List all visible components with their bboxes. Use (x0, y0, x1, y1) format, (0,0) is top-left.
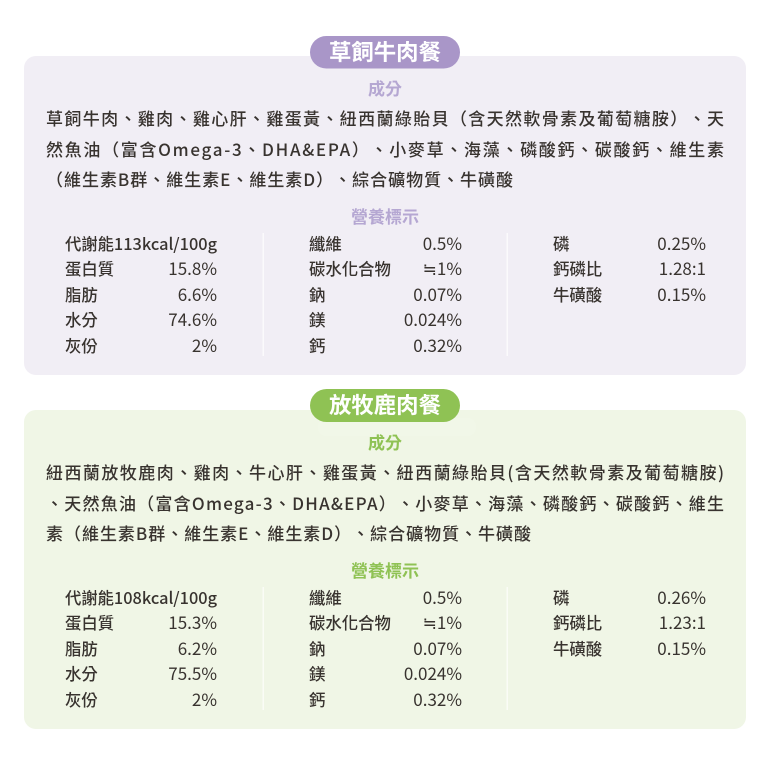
nutrition column 2 (309, 584, 462, 711)
nutrition column 2: 0.5% (423, 230, 462, 255)
ingredients text: 素（維生素B群、維生素E、維生素D）、綜合礦物質、牛磺酸 (46, 520, 531, 545)
panel: free-range venison meal (24, 388, 746, 729)
heading: ingredients: 成分 (368, 75, 402, 100)
nutrition column 1: 15.3% (168, 609, 217, 634)
ingredients text: 、天然魚油（富含Omega-3、DHA&EPA）、小麥草、海藻、磷酸鈣、碳酸鈣、維生 (46, 490, 724, 515)
nutrition column 1: 灰份 (65, 333, 98, 357)
nutrition column 2: 鈣 (309, 333, 325, 357)
nutrition column 2: 0.024% (404, 306, 462, 331)
nutrition column 3: 0.15% (657, 281, 706, 306)
heading: nutrition facts: 營養標示 (351, 557, 419, 582)
nutrition column 1: 2% (192, 332, 217, 357)
nutrition column 1: 6.6% (178, 281, 217, 306)
nutrition column 3: 磷 (553, 231, 569, 255)
ingredients text (46, 459, 724, 545)
nutrition column 2: 碳水化合物 (309, 610, 391, 634)
nutrition column 2: 0.5% (423, 584, 462, 609)
nutrition column 2: 碳水化合物 (309, 256, 391, 280)
nutrition column 1 (65, 231, 218, 357)
nutrition column 2 (309, 230, 462, 357)
nutrition column 1: 代謝能108kcal/100g (65, 585, 218, 609)
nutrition column 1: 2% (192, 686, 217, 711)
nutrition column 2: 纖維 (309, 585, 342, 609)
title pill: beef: 草飼牛肉餐 (329, 35, 441, 67)
nutrition column 3: 鈣磷比 (553, 256, 602, 280)
nutrition column 2: 鎂 (309, 307, 325, 331)
nutrition column 1: 脂肪 (65, 636, 98, 660)
nutrition column 2: 鈣 (309, 687, 325, 711)
nutrition column 2: 0.32% (413, 686, 462, 711)
heading: nutrition facts: 營養標示 (351, 203, 419, 228)
nutrition column 3 (553, 230, 706, 306)
ingredients text: 草飼牛肉、雞肉、雞心肝、雞蛋黃、紐西蘭綠貽貝（含天然軟骨素及葡萄糖胺）、天 (46, 105, 724, 130)
nutrition column 3: 磷 (553, 585, 569, 609)
nutrition column 3: 1.23:1 (659, 609, 706, 634)
nutrition column 1: 水分 (65, 307, 98, 331)
nutrition column 1: 脂肪 (65, 282, 98, 306)
nutrition column 3: 1.28:1 (659, 255, 706, 280)
nutrition column 2: 0.07% (413, 281, 462, 306)
nutrition column 3: 0.26% (657, 584, 706, 609)
nutrition column 3: 牛磺酸 (553, 282, 602, 306)
ingredients text: 紐西蘭放牧鹿肉、雞肉、牛心肝、雞蛋黃、紐西蘭綠貽貝(含天然軟骨素及葡萄糖胺) (46, 459, 724, 484)
nutrition column 1: 15.8% (168, 255, 217, 280)
panel background: beef (24, 56, 746, 375)
nutrition column 2: 0.024% (404, 660, 462, 685)
ingredients text (46, 105, 724, 191)
nutrition column 2: ≒1% (423, 255, 462, 280)
nutrition column 2: 鈉 (309, 282, 325, 306)
nutrition column 1: 灰份 (65, 687, 98, 711)
nutrition column 2: 0.07% (413, 635, 462, 660)
nutrition column 1: 代謝能113kcal/100g (65, 231, 218, 255)
ingredients text: （維生素B群、維生素E、維生素D）、綜合礦物質、牛磺酸 (46, 166, 513, 191)
nutrition column 1: 74.6% (168, 306, 217, 331)
panel background: venison (24, 410, 746, 729)
title pill: venison: 放牧鹿肉餐 (329, 388, 441, 420)
nutrition column 1: 蛋白質 (65, 610, 114, 634)
nutrition column 2: ≒1% (423, 609, 462, 634)
nutrition column 2: 鎂 (309, 661, 325, 685)
heading: ingredients: 成分 (368, 429, 402, 454)
panel: grass-fed beef meal (24, 35, 746, 375)
ingredients text: 然魚油（富含Omega-3、DHA&EPA）、小麥草、海藻、磷酸鈣、碳酸鈣、維生素 (46, 136, 724, 161)
nutrition column 2: 鈉 (309, 636, 325, 660)
nutrition column 3: 牛磺酸 (553, 636, 602, 660)
nutrition column 3: 鈣磷比 (553, 610, 602, 634)
nutrition column 1: 水分 (65, 661, 98, 685)
nutrition column 2: 0.32% (413, 332, 462, 357)
nutrition column 1: 蛋白質 (65, 256, 114, 280)
nutrition column 2: 纖維 (309, 231, 342, 255)
nutrition column 3: 0.25% (657, 230, 706, 255)
nutrition column 3: 0.15% (657, 635, 706, 660)
nutrition column 1: 6.2% (178, 635, 217, 660)
nutrition column 1: 75.5% (168, 660, 217, 685)
nutrition column 3 (553, 584, 706, 660)
nutrition column 1 (65, 585, 218, 711)
title pill: venison (310, 388, 476, 436)
